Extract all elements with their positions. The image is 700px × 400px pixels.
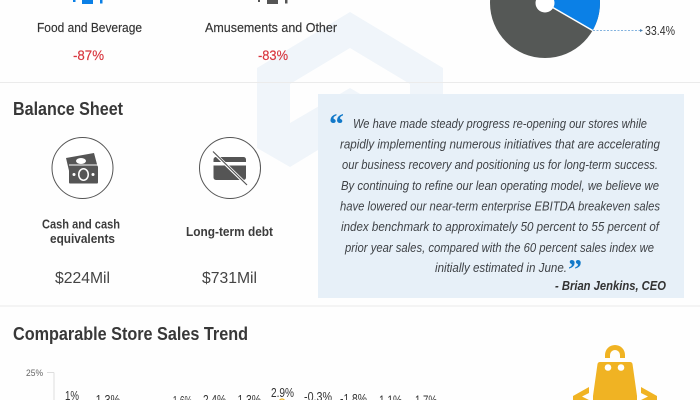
data labels: 2.9% (271, 386, 294, 400)
icon: credit card crossed (200, 138, 260, 198)
data labels (65, 386, 437, 400)
quote text: rapidly implementing numerous initiatives that are accelerating (340, 136, 661, 152)
value: amusements change: -83% (258, 47, 288, 63)
quote text: have lowered our near-term enterprise EBITDA breakeven sales (340, 198, 660, 214)
quote mark: closing: ” (568, 255, 582, 286)
pie chart (490, 0, 600, 58)
quote text: prior year sales, compared with the 60 percent sales index we (344, 240, 654, 255)
value: food and beverage change: -87% (73, 47, 104, 63)
quote text: our business recovery and positioning us for long-term success. (342, 157, 658, 172)
icon: food and beverage (73, 0, 102, 4)
quote text: index benchmark to approximately 50 percent to 55 percent of (341, 219, 660, 234)
panel: CEO quote (318, 94, 684, 298)
pie leader line (593, 29, 643, 32)
quote text: By continuing to refine our lean operating model, we believe we (341, 178, 659, 193)
line chart (26, 368, 437, 400)
quote text: initially estimated in June. (435, 260, 567, 275)
label: food and beverage: Food and Beverage (37, 20, 142, 35)
label: cash and cash equivalents: equivalents (50, 231, 115, 246)
label: amusements and other: Amusements and Other (205, 20, 338, 35)
label: long-term debt: Long-term debt (186, 224, 274, 239)
icon: cash (52, 138, 113, 198)
quote text: We have made steady progress re-opening our stores while (353, 116, 647, 131)
heading: comparable store sales trend: Comparable Store Sales Trend (13, 323, 248, 344)
quote mark: opening: “ (329, 108, 344, 141)
icon: shopping bag (573, 345, 657, 400)
axis label: 25% (26, 368, 43, 379)
icon: amusements (258, 0, 288, 4)
heading: balance sheet: Balance Sheet (13, 99, 123, 119)
label: cash and cash equivalents: Cash and cash (42, 216, 120, 232)
value: cash: $224Mil (55, 270, 110, 287)
watermark: hexagon logo (257, 12, 443, 167)
pie label: 33.4% (645, 24, 675, 38)
value: debt: $731Mil (202, 270, 257, 287)
quote attribution: - Brian Jenkins, CEO (555, 278, 666, 293)
